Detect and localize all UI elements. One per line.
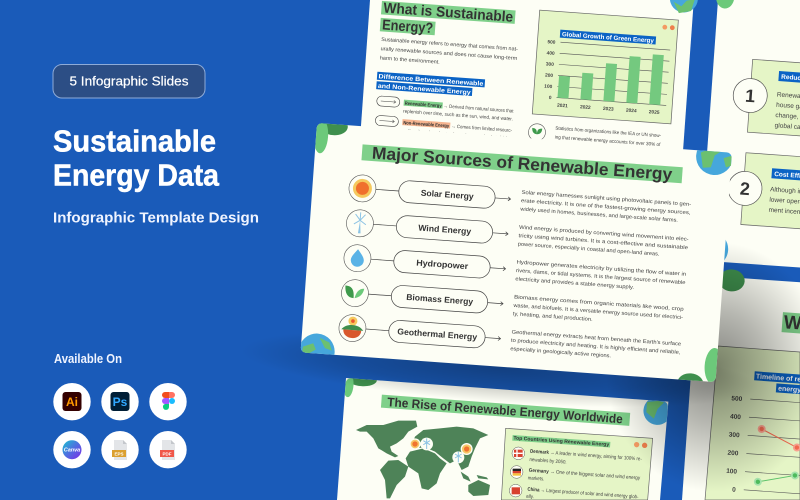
row: geothermal energy: especially in geologically active regions. [510, 346, 611, 359]
slide: what is sustainable energy [360, 0, 699, 168]
flag: Denmark [512, 447, 525, 460]
icon: wind marker europe [420, 438, 433, 450]
row: biomass energy: ty, heating, and fuel production. [513, 311, 593, 323]
row: biomass energy: Biomass energy comes from organic materials like wood, crop [514, 295, 684, 313]
panel: global growth bar chart: 2025 [649, 109, 660, 116]
row: wind energy [346, 209, 689, 260]
renewable energy definition [376, 96, 514, 123]
row: wind energy: Wind Energy [418, 223, 472, 236]
row: wind energy: power source, especially in coastal and open-land areas. [518, 241, 660, 258]
row: solar energy: Solar Energy [420, 188, 474, 201]
icon: earth corner [669, 0, 699, 14]
slide: benefits list [691, 0, 800, 279]
panel: global growth bar chart: Global Growth of Green Energy [562, 31, 655, 45]
row: wind energy: Wind energy is produced by converting wind movement into elec- [519, 225, 689, 243]
number badge 2: 2 [739, 179, 751, 199]
country descriptions: Denmark → A leader in wind energy, aiming for 100% re- [530, 449, 642, 462]
slide: major sources of renewable energy [300, 123, 732, 382]
statistics text: Statistics from organizations like the IEA or UN show- [555, 126, 662, 139]
panel: timeline line chart: 400 [730, 413, 742, 421]
icon: earth corner [691, 230, 729, 268]
icon: Adobe Illustrator: Ai [66, 395, 78, 409]
title [53, 124, 220, 192]
panel: global growth bar chart: 300 [546, 61, 554, 68]
icon: earth bottom-left [300, 334, 335, 355]
subtitle: Infographic Template Design [53, 210, 259, 226]
row: geothermal energy: Geothermal Energy [397, 326, 478, 342]
panel: global growth bar chart: 2024 [626, 108, 637, 114]
badge: 5 infographic slides: 5 Infographic Slides [70, 74, 188, 88]
row: hydropower: electricity and provides a stable energy supply. [515, 276, 634, 291]
icon: leaf corner [715, 0, 735, 9]
intro paragraph: urally renewable sources and does not cause long-term [380, 46, 518, 62]
shadow under main slide [233, 208, 800, 500]
non-renewable energy definition: es like oil, coal, and natural gas. Its usage leads to high [401, 128, 509, 142]
flag: China [509, 484, 522, 497]
number badge 2 [727, 170, 763, 207]
icon: leaf corner [344, 378, 377, 398]
non-renewable energy definition: Non-Renewable Energy [403, 120, 450, 129]
panel: global growth bar chart: 100 [544, 84, 553, 90]
heading: difference between renewable: and Non-Renewable Energy [378, 83, 471, 96]
row: geothermal energy: to produce electricity and heating. It is highly efficient and reliable, [511, 338, 681, 356]
icon: water drop [343, 244, 372, 273]
icon: wind marker asia [452, 451, 464, 463]
icon: earth top-right [696, 150, 732, 175]
icon: solar marker asia [461, 443, 473, 455]
icon: PDF file: PDF [162, 452, 172, 457]
title: Energy Data [53, 158, 220, 192]
panel: top countries [501, 428, 653, 500]
flag: Germany [510, 466, 523, 478]
panel: reduce carbon emissions [747, 59, 800, 142]
row: solar energy: widely used in homes, businesses, and large-scale solar farms. [520, 207, 678, 224]
icon: Adobe Photoshop: Ps [113, 395, 128, 409]
icon: Adobe Illustrator [53, 383, 91, 420]
row: hydropower [343, 244, 687, 295]
icon: sun [348, 174, 377, 203]
country descriptions: markets. [528, 475, 545, 482]
panel: global growth bar chart [532, 10, 678, 124]
title band: Major Sources of Renewable Energy [371, 144, 673, 184]
row: biomass energy: waste, and biofuels. It is a versatile energy source used for electrici- [513, 303, 683, 321]
panel: global growth bar chart: 0 [549, 95, 552, 101]
panel: global growth bar chart: 500 [547, 39, 556, 46]
non-renewable energy definition [375, 115, 513, 142]
row: wind energy: tricity using wind turbines. It is a cost-effective and sustainable [518, 233, 688, 251]
icon: leaf corner [718, 269, 745, 292]
panel: cost efficiency [741, 153, 800, 235]
icon: Canva [53, 431, 91, 468]
slide: timeline chart [682, 269, 800, 500]
statistics text: ing that renewable energy accounts for over 30% of [554, 135, 661, 148]
country descriptions: newables by 2050. [529, 457, 567, 466]
panel: global growth bar chart: 200 [545, 73, 554, 79]
icon: EPS file: EPS [114, 452, 124, 457]
panel: timeline line chart: 300 [729, 432, 740, 439]
icon: wind turbine [346, 209, 374, 238]
panel: timeline line chart: 0 [732, 486, 736, 494]
renewable energy definition: → Derived from natural sources that [443, 104, 514, 115]
intro paragraph: harm to the environment. [380, 55, 440, 66]
slide: rise of renewable energy worldwide [337, 371, 673, 500]
title band: The Rise of Renewable Energy Worldwide [387, 395, 623, 426]
icon: earth corner [643, 400, 668, 425]
badge: 5 infographic slides [53, 64, 205, 98]
panel: global growth bar chart: 2022 [580, 104, 591, 111]
renewable energy definition: Renewable Energy [404, 101, 442, 109]
country descriptions [526, 449, 642, 500]
intro paragraph: Sustainable energy refers to energy that comes from nat- [381, 37, 518, 53]
heading: difference between renewable: Difference Between Renewable [378, 73, 484, 88]
heading: what is sustainable energy [380, 0, 516, 43]
intro paragraph [380, 37, 519, 71]
country descriptions: Germany → One of the biggest solar and wind energy [529, 468, 641, 481]
renewable energy definition: replenish over time, such as the sun, wind, and water. [403, 109, 513, 123]
panel: global growth bar chart: 2023 [603, 106, 614, 113]
panel: timeline line chart: 200 [727, 450, 739, 457]
non-renewable energy definition: → Comes from limited resourc- [451, 124, 513, 134]
row: hydropower: Hydropower [416, 257, 469, 271]
icon: Canva: Canva [64, 448, 80, 454]
icon: leaves [341, 279, 369, 308]
row: solar energy: Solar energy harnesses sunlight using photovoltaic panels to gen- [521, 190, 692, 208]
icon: EPS file [101, 431, 139, 468]
row: hydropower: Hydropower generates electricity by utilizing the flow of water in [516, 260, 686, 278]
panel: global growth bar chart: 2021 [557, 103, 568, 109]
available on heading: Available On [54, 352, 122, 366]
number badge 1: 1 [745, 86, 756, 106]
statistics text [554, 126, 662, 148]
icon: leaf badge [528, 123, 546, 141]
panel: timeline line chart: 500 [731, 395, 743, 403]
icon: Figma [149, 383, 187, 420]
icon: Adobe Photoshop [101, 383, 139, 420]
icon: solar marker europe [409, 438, 421, 450]
row: hydropower: rivers, dams, or tidal systems. It is the largest source of renewable [516, 268, 686, 286]
title: Sustainable [53, 124, 216, 158]
panel: global growth bar chart: 400 [546, 50, 555, 57]
icon: geothermal [338, 314, 367, 342]
icon: PDF file [149, 431, 187, 468]
heading: difference between renewable [376, 72, 485, 97]
row: biomass energy [341, 279, 684, 330]
number badge 1 [732, 77, 768, 114]
row: geothermal energy [338, 314, 682, 365]
heading: what is sustainable energy: Energy? [382, 17, 434, 37]
panel: top countries: Top Countries Using Renewable Energy [513, 435, 610, 448]
icon: leaves bottom-right [678, 348, 718, 382]
row: solar energy [348, 174, 692, 225]
icon: leaves top-left [315, 123, 348, 154]
row: geothermal energy: Geothermal energy extracts heat from beneath the Earth's surface [511, 329, 681, 348]
row: biomass energy: Biomass Energy [406, 292, 474, 307]
world map [356, 421, 490, 498]
panel: timeline line chart: 100 [726, 468, 738, 476]
panel: timeline line chart [705, 346, 800, 500]
heading: what is sustainable energy: What is Sustainable [383, 1, 514, 26]
row: solar energy: erate electricity. It is one of the fastest-growing energy sources, [521, 198, 691, 216]
